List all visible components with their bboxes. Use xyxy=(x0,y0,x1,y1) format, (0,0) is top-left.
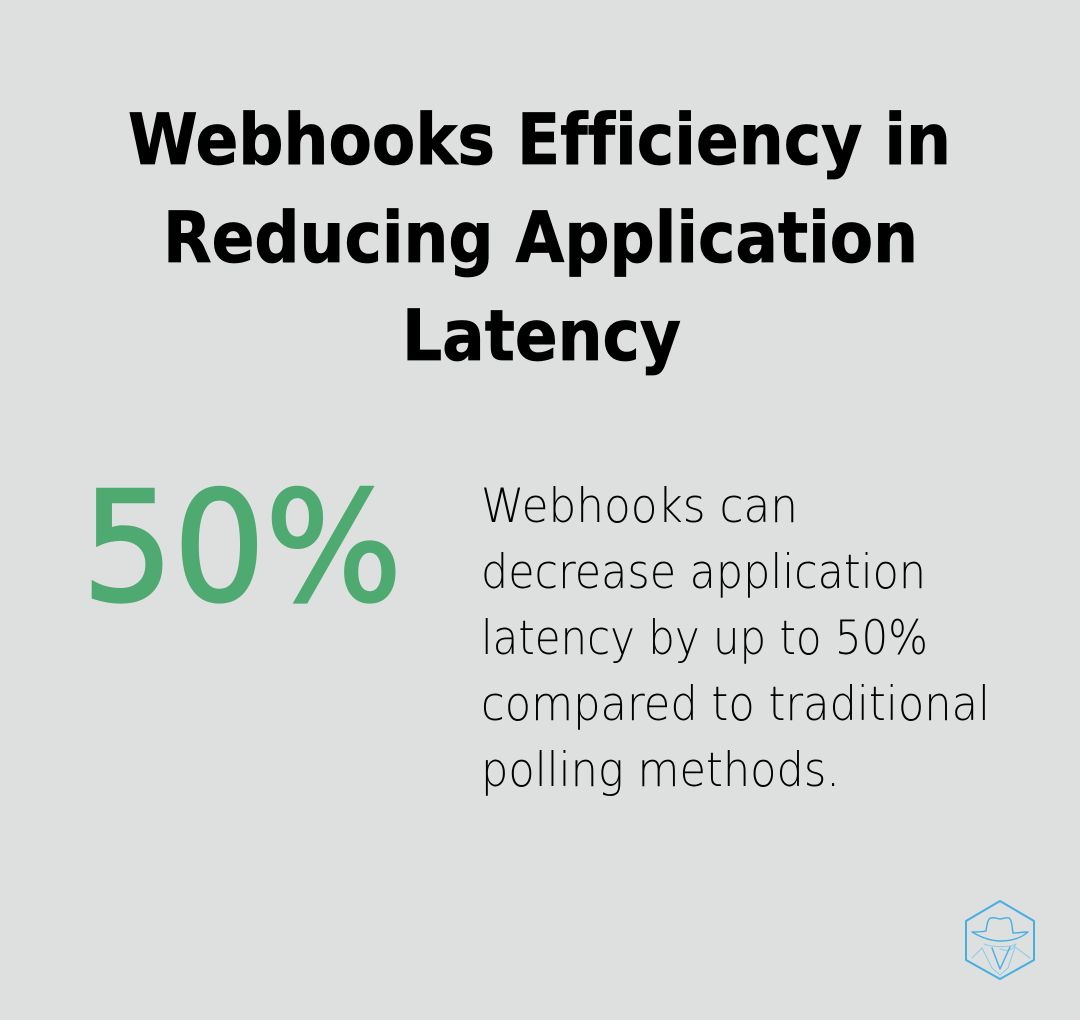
description text: compared to traditional xyxy=(481,677,990,732)
title: Webhooks Efficiency in xyxy=(128,99,951,181)
description text: Webhooks can xyxy=(481,479,798,534)
description text: polling methods. xyxy=(481,743,840,798)
description text xyxy=(481,479,990,798)
title xyxy=(128,99,951,377)
title: Latency xyxy=(402,295,681,377)
title: Reducing Application xyxy=(163,197,918,279)
big statistic: 50%: 50% xyxy=(82,459,402,636)
description text: latency by up to 50% xyxy=(481,611,928,666)
icon: spy logo in hexagon xyxy=(966,901,1034,979)
description text: decrease application xyxy=(481,545,926,600)
